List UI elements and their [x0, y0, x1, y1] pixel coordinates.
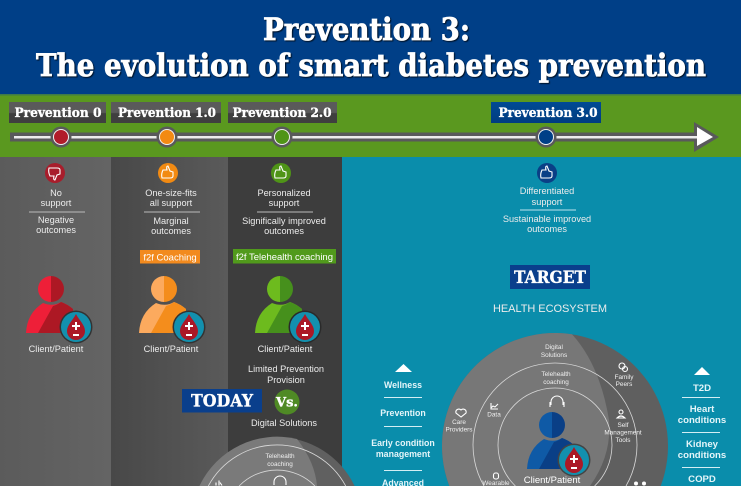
label: target: TARGET: [514, 268, 586, 288]
target ecosystem diagram: [442, 333, 668, 486]
timeline dot: blue: [536, 126, 556, 148]
tag: f2f telehealth coaching: f2f Telehealth coaching: [236, 252, 333, 263]
header band: [0, 0, 741, 95]
icon: thumbs up blue: [537, 163, 557, 183]
column: Prevention 3.0 background: [342, 157, 741, 486]
label: today: TODAY: [191, 392, 254, 412]
text: no support: No: [50, 188, 62, 198]
label: digital solutions: [541, 344, 567, 359]
timeline dot: orange: [156, 126, 178, 148]
list: conditions: conditions: [678, 415, 726, 426]
tab: Prevention 1.0: Prevention 1.0: [118, 106, 216, 121]
label: family peers: Peers: [616, 381, 632, 388]
today ecosystem diagram: Telehealth: [265, 453, 295, 460]
label: digital solutions: Digital Solutions: [251, 418, 317, 428]
label: client/patient: Client/Patient: [29, 344, 84, 354]
label: client/patient: Client/Patient: [524, 475, 581, 486]
timeline arrow: [10, 122, 719, 152]
list: conditions: T2D: [693, 383, 711, 394]
label: self management tools: Tools: [616, 437, 630, 444]
list: conditions: COPD: [688, 474, 716, 485]
tab: Prevention 1.0: [111, 102, 221, 123]
text: differentiated: Sustainable improved: [503, 214, 591, 224]
text: one-size-fits: One-size-fits: [145, 188, 197, 198]
text: differentiated: [503, 186, 591, 234]
title: [36, 12, 706, 84]
list: wellness severity: management: [376, 449, 430, 459]
label: data: Data: [487, 412, 501, 418]
list: wellness severity: [371, 364, 435, 486]
text: differentiated: outcomes: [527, 224, 567, 234]
column: Prevention 1.0 background: [111, 157, 228, 486]
label: family peers: [615, 363, 634, 388]
tab: Prevention 0: [9, 102, 106, 123]
text: differentiated: support: [532, 197, 563, 207]
text: personalized: Significally improved: [242, 216, 326, 226]
today ecosystem diagram: coaching: [267, 461, 293, 468]
list: conditions: [678, 367, 726, 485]
tab: Prevention 3.0: [491, 102, 601, 123]
icon: blood drop badge: [288, 310, 322, 344]
text: no support: outcomes: [36, 225, 76, 235]
list: conditions: Kidney: [686, 439, 719, 450]
text: no support: Negative: [38, 215, 74, 225]
label: self management tools: Management: [604, 430, 642, 436]
icon: headphones: [550, 396, 564, 407]
timeline dot: red: [50, 126, 72, 148]
icon: thumbs down: [45, 163, 65, 183]
label: care providers: Providers: [446, 426, 472, 434]
timeline dot: green: [272, 126, 292, 148]
text: limited prevention provision: Limited Prevention: [248, 364, 324, 374]
label: care providers: [446, 409, 472, 434]
text: no support: [29, 188, 85, 235]
text: limited prevention provision: Provision: [267, 375, 305, 385]
icon: thumbs up orange: [158, 163, 178, 183]
text: personalized: Personalized: [257, 188, 311, 198]
list: wellness severity: Wellness: [384, 380, 422, 390]
title: Prevention 3:: [263, 12, 470, 48]
tab: Prevention 2.0: Prevention 2.0: [232, 106, 332, 121]
text: one-size-fits: Marginal: [153, 216, 189, 226]
person: red client: [26, 276, 73, 333]
label: family peers: Family: [615, 374, 634, 381]
label: digital solutions: Digital: [545, 344, 563, 351]
label: client/patient: Client/Patient: [144, 344, 199, 354]
column: Prevention 0 background: [0, 157, 111, 486]
column: Prevention 2.0 background: [228, 157, 342, 486]
tag: f2f coaching: f2f Coaching: [143, 252, 197, 264]
text: one-size-fits: all support: [150, 198, 193, 208]
icon: blood drop badge: [60, 310, 92, 344]
label: self management tools: Self: [617, 422, 629, 429]
icon: blood drop badge: [172, 310, 206, 344]
text: personalized: [242, 188, 326, 236]
label: telehealth coaching: Telehealth: [541, 371, 571, 378]
timeline band: [0, 94, 741, 157]
label: telehealth coaching: [541, 371, 571, 386]
text: no support: support: [41, 198, 72, 208]
list: wellness severity: Prevention: [380, 408, 426, 418]
person: orange client: [139, 276, 186, 333]
icon: people: [634, 482, 646, 486]
label: data: [487, 403, 501, 418]
list: conditions: conditions: [678, 450, 726, 461]
tab: Prevention 2.0: [228, 102, 337, 123]
label: care providers: Care: [452, 419, 466, 426]
person: green client: [255, 276, 302, 333]
text: personalized: support: [269, 198, 300, 208]
label: self management tools: [604, 410, 642, 444]
text: limited prevention provision: [248, 364, 324, 385]
tab: Prevention 0: Prevention 0: [14, 106, 102, 121]
badge: vs: Vs.: [275, 396, 298, 410]
list: wellness severity: Early condition: [371, 438, 435, 448]
text: personalized: outcomes: [264, 226, 304, 236]
heading: health ecosystem: HEALTH ECOSYSTEM: [493, 303, 607, 315]
tab: Prevention 3.0: Prevention 3.0: [498, 106, 598, 121]
icon: thumbs up green: [271, 163, 291, 183]
icon: blood drop badge: [558, 444, 590, 476]
list: conditions: Heart: [690, 404, 715, 415]
badge: vs: [274, 390, 300, 414]
label: wearable: [482, 473, 510, 486]
person: blue client: [527, 412, 574, 469]
text: one-size-fits: [144, 188, 200, 236]
label: digital solutions: Solutions: [541, 352, 567, 359]
today ecosystem diagram: [199, 437, 355, 486]
label: client/patient: Client/Patient: [258, 344, 313, 354]
label: telehealth coaching: coaching: [543, 379, 569, 386]
text: one-size-fits: outcomes: [151, 226, 191, 236]
text: differentiated: Differentiated: [520, 186, 574, 196]
